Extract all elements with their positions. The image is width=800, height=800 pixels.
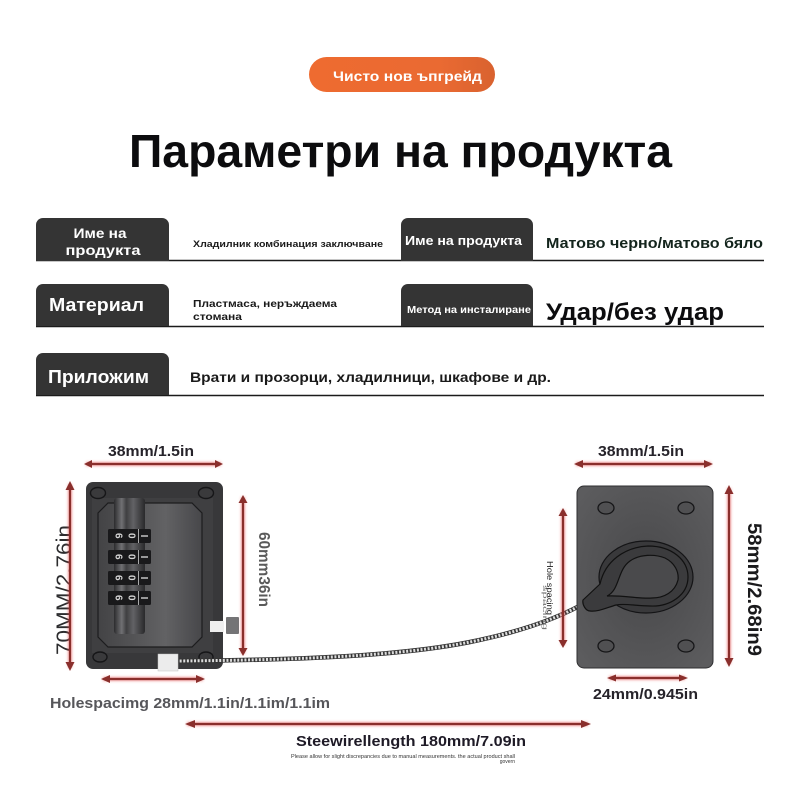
dimension: left width label: 38mm/1.5in xyxy=(108,444,194,460)
row: install method label: Метод на инсталиране xyxy=(407,305,531,316)
row: product name label: Име на xyxy=(74,225,127,241)
row: colour label xyxy=(401,218,533,261)
dimension: right width label: 38mm/1.5in xyxy=(598,444,684,460)
dimension: left width arrow xyxy=(84,460,223,468)
combination wheels: 6 xyxy=(112,554,124,560)
badge: upgrade pill: Чисто нов ъпгрейд xyxy=(333,68,482,84)
disclaimer note: Please allow for slight discrepancies due to manual measurements. the actual product shall xyxy=(291,754,515,760)
combination wheels: 6 xyxy=(112,575,124,581)
dimension: inner height arrow xyxy=(238,495,248,656)
row: colour label: Име на продукта xyxy=(405,234,523,248)
dimension: wire length arrow xyxy=(185,720,591,728)
row: material value: Пластмаса, неръждаема xyxy=(193,298,337,310)
row: product name label: продукта xyxy=(66,242,141,258)
disclaimer note: govern xyxy=(500,759,515,765)
row: material value xyxy=(193,298,337,323)
teardrop loop xyxy=(583,546,688,611)
combination wheels: 0 xyxy=(126,554,136,560)
dimension: plate hole width label: 24mm/0.945in xyxy=(593,687,698,703)
dimension: hole spacing arrow xyxy=(101,675,205,683)
disclaimer note xyxy=(291,754,515,765)
combination wheels: 0 xyxy=(126,595,136,601)
row: product name label xyxy=(36,218,169,261)
title: Параметри на продукта xyxy=(129,125,672,177)
row: colour value: Матово черно/матово бяло xyxy=(546,235,763,252)
ring base xyxy=(599,541,693,613)
panel: parameter table xyxy=(36,218,764,396)
cylinder xyxy=(114,498,145,634)
row: application value: Врати и прозорци, хладилници, шкафове и др. xyxy=(190,369,551,385)
dimension: plate hole height arrow xyxy=(558,508,568,648)
row: material label xyxy=(36,284,169,326)
row: install method label xyxy=(401,284,533,326)
row: material label: Материал xyxy=(49,295,144,315)
dimension: right height arrow xyxy=(724,485,734,667)
row: material value: стомана xyxy=(193,311,242,323)
mounting holes xyxy=(90,488,214,662)
dimension: plate hole height label: spacing xyxy=(541,585,547,630)
dimension: right height label: 58mm/2.68in9 xyxy=(743,523,764,656)
dimension: inner height label: 60mm36in xyxy=(255,532,272,607)
side latch xyxy=(210,617,239,634)
badge: upgrade pill xyxy=(309,57,495,92)
dimension: plate hole height label: Hole spacing xyxy=(545,561,554,615)
dimension: wire length label: Steewirellength 180mm/7.09in xyxy=(296,733,526,750)
dimension: right width arrow xyxy=(574,460,713,468)
combination wheels: 0 xyxy=(126,575,136,581)
wire clip xyxy=(158,654,178,671)
dimension: hole spacing label: Holespacimg 28mm/1.1in/1.1im/1.1im xyxy=(50,696,330,712)
plate holes xyxy=(598,502,694,652)
row: product name value: Хладилник комбинация заключване xyxy=(193,239,383,250)
combination wheels: 0 xyxy=(126,533,136,539)
dimension: plate hole height label xyxy=(541,561,554,630)
row: application label xyxy=(36,353,169,395)
row: application label: Приложим xyxy=(48,367,149,387)
lock body: combination lock xyxy=(86,482,239,669)
combination wheels: 6 xyxy=(112,595,124,601)
dimension: plate hole width arrow xyxy=(607,674,688,682)
row: install method value: Удар/без удар xyxy=(546,299,724,326)
steel wire xyxy=(176,600,590,661)
dimension: left height arrow xyxy=(66,481,74,671)
combination wheels: 6 xyxy=(112,533,124,539)
dimension: left height label: 70MM/2.76in xyxy=(53,525,76,655)
receiver plate with wire loop xyxy=(577,486,713,668)
combination wheels xyxy=(108,529,151,605)
